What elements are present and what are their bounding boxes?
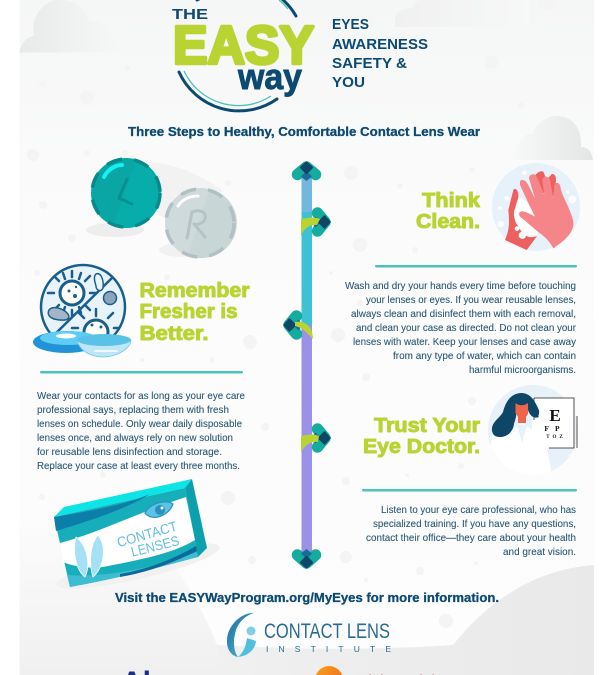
heading: Remember Fresher is Better	[140, 279, 250, 345]
heading: Think Clean	[416, 189, 481, 233]
website call to action: Visit the EASYWayProgram.org/MyEyes for more information.	[115, 590, 499, 605]
logo: Contact Lens Institute	[227, 613, 391, 657]
text: trust your eye doctor	[366, 505, 576, 558]
icon: eye doctor: FP	[544, 424, 566, 433]
cloud top centre	[395, 0, 530, 27]
text: trust your eye doctor: contact their office—they care about your health	[366, 533, 576, 544]
text: think clean: always clean and disinfect them with each removal,	[351, 309, 576, 320]
icon: left chevron	[284, 316, 313, 339]
icon: eye doctor: E	[549, 406, 561, 425]
text: fresher is better: lenses on schedule. Only wear daily disposable	[37, 419, 242, 430]
icon: eye doctor: TOZ	[546, 435, 566, 440]
icon: germs and lenses	[33, 265, 131, 357]
logo: EASY	[173, 16, 314, 76]
logo: Contact Lens Institute: INSTITUTE	[266, 644, 391, 654]
icon: eye doctor	[488, 385, 578, 471]
heading: Remember Fresher is Better: Fresher is	[140, 300, 238, 323]
icon: right chevron two	[301, 429, 330, 452]
icon: washing hands	[492, 163, 580, 251]
text: trust your eye doctor: Listen to your eye care professional, who has	[381, 505, 576, 516]
text: fresher is better: for reusable lens disinfection and storage.	[37, 447, 222, 458]
heading: Trust Your Eye Doctor: Trust Your	[374, 414, 480, 437]
timeline arrow	[284, 162, 330, 568]
icon: lens case	[86, 158, 237, 258]
heading: Think Clean: Think	[422, 189, 481, 212]
tagline: EASY acronym: EYES	[332, 16, 369, 33]
text: think clean: your lenses or eyes. If you wear reusable lenses,	[366, 295, 576, 306]
text: fresher is better: professional says, replacing them with fresh	[37, 405, 229, 416]
icon: contact lens box: LENSES	[129, 532, 181, 560]
logo: Contact Lens Institute: CONTACT LENS	[264, 620, 390, 643]
text: fresher is better	[37, 391, 245, 472]
heading: Trust Your Eye Doctor	[363, 414, 480, 458]
logo	[172, 0, 314, 111]
text: fresher is better: Replace your case at least every three months.	[37, 461, 240, 472]
text: think clean: and clean your case as directed. Do not clean your	[356, 323, 577, 334]
cloud top left	[20, 0, 125, 52]
tagline: EASY acronym	[332, 16, 428, 91]
text: think clean	[345, 281, 577, 376]
tagline: EASY acronym: AWARENESS	[332, 36, 428, 53]
heading: Remember Fresher is Better: Better.	[140, 322, 208, 345]
subtitle: Three Steps to Healthy, Comfortable Contact Lens Wear	[128, 124, 480, 139]
text: trust your eye doctor: and great vision.	[503, 547, 576, 558]
text: think clean: harmful microorganisms.	[469, 365, 576, 376]
text: think clean: lenses with water. Keep your lenses and case away	[353, 337, 577, 348]
icon: bottom chevron	[298, 549, 316, 568]
icon: contact lens box: CONTACT	[115, 518, 179, 550]
text: fresher is better: Wear your contacts for as long as your eye care	[37, 391, 245, 402]
icon: top chevron	[298, 162, 316, 181]
tagline: EASY acronym: YOU	[332, 74, 365, 91]
text: think clean: from any type of water, which can contain	[393, 351, 576, 362]
heading: Trust Your Eye Doctor: Eye Doctor.	[363, 435, 480, 458]
text: trust your eye doctor: specialized training. If you have any questions,	[373, 519, 576, 530]
heading: Remember Fresher is Better: Remember	[140, 279, 250, 302]
icon: contact lens box	[53, 479, 223, 598]
logo: way	[237, 56, 302, 97]
tagline: EASY acronym: SAFETY &	[332, 55, 407, 72]
text: fresher is better: lenses once, and always rely on new solution	[37, 433, 233, 444]
cloud top right	[513, 116, 593, 160]
logo: THE	[172, 7, 208, 23]
heading: Think Clean: Clean.	[416, 210, 480, 233]
sponsor logo: orange sphere	[315, 666, 433, 675]
text: think clean: Wash and dry your hands every time before touching	[345, 281, 576, 292]
icon: right chevron one	[301, 213, 330, 236]
